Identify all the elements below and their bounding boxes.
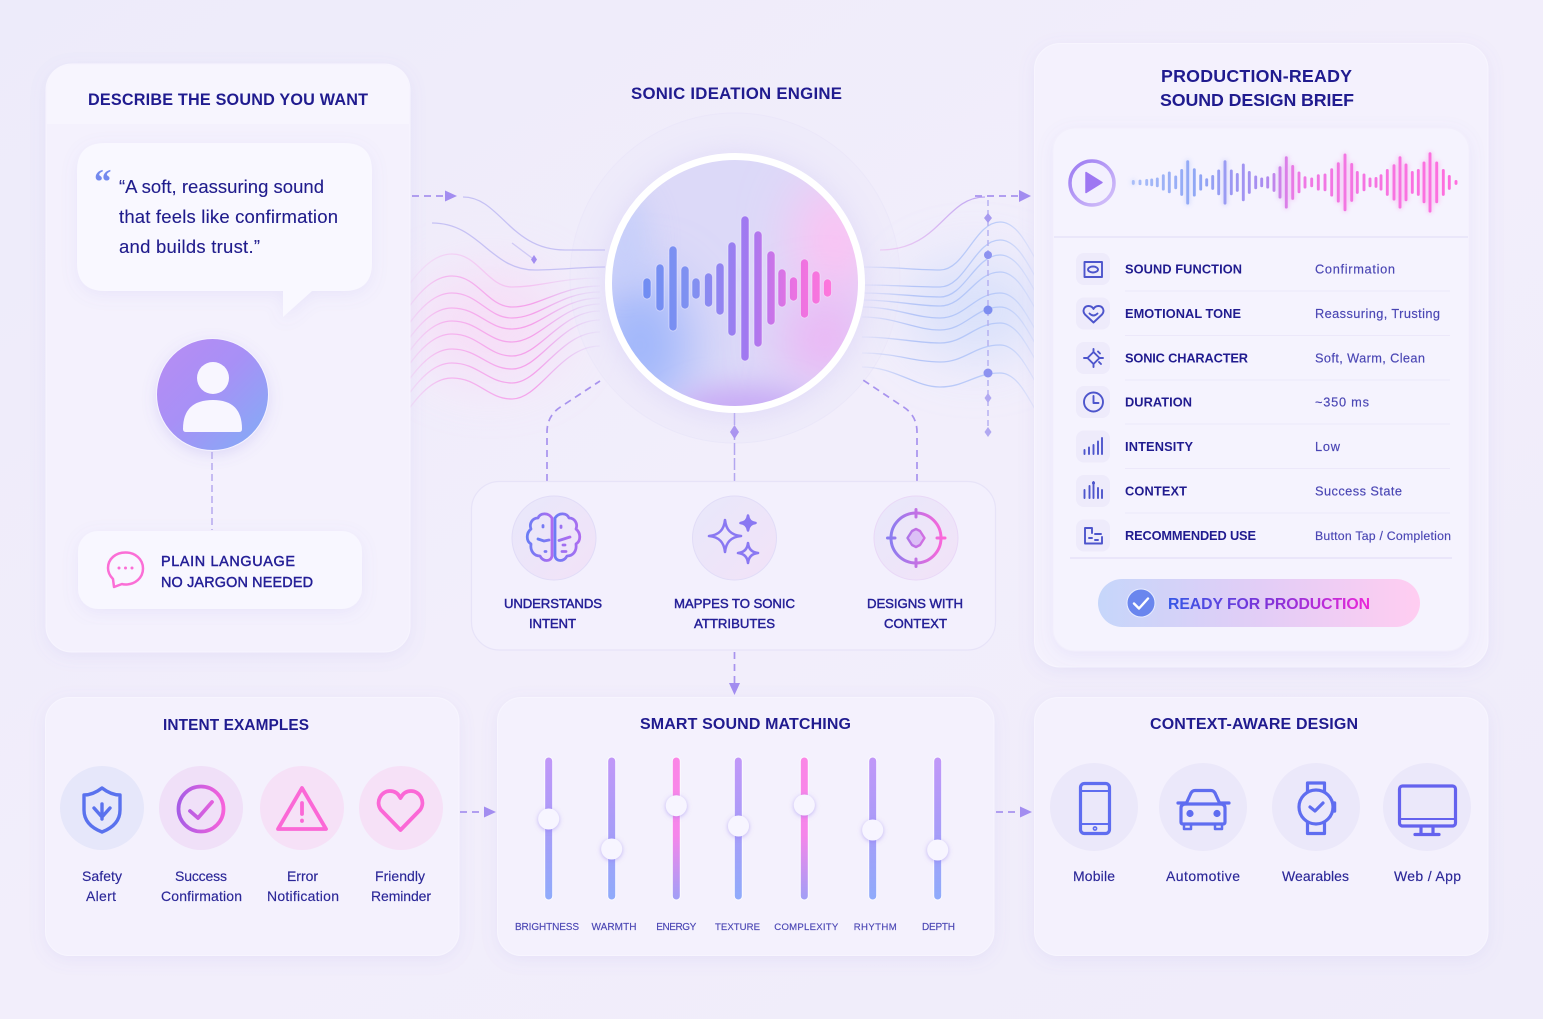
icon: watch	[1299, 783, 1334, 834]
icon: chat bubble	[108, 552, 143, 587]
label and value	[1125, 306, 1440, 321]
context label: Mobile	[1073, 868, 1115, 884]
capability label: CONTEXT	[884, 616, 947, 631]
slider: complexity	[774, 757, 839, 933]
plain language callout	[78, 531, 362, 609]
central engine orb	[604, 153, 868, 418]
label and value: SOUND FUNCTION	[1125, 262, 1242, 276]
label and value: Soft, Warm, Clean	[1315, 350, 1425, 366]
slider: complexity: COMPLEXITY	[774, 922, 839, 933]
context label: Wearables	[1282, 868, 1349, 884]
intent label: Notification	[267, 888, 339, 904]
slider: texture: TEXTURE	[715, 922, 760, 933]
status label: READY FOR PRODUCTION	[1168, 596, 1370, 613]
label and value: DURATION	[1125, 394, 1192, 410]
brief heading: PRODUCTION-READY	[1161, 66, 1352, 86]
icon: check circle	[178, 786, 224, 832]
label and value: Confirmation	[1315, 262, 1395, 276]
panel: describe the sound	[46, 64, 410, 652]
intent label	[161, 868, 242, 904]
capability: maps to sonic attributes	[674, 496, 795, 631]
intent label	[267, 868, 339, 904]
brief inner card	[1053, 128, 1469, 651]
brief heading	[1160, 66, 1354, 110]
panel heading: DESCRIBE THE SOUND YOU WANT	[88, 91, 368, 109]
icon: user avatar	[156, 338, 268, 450]
prompt text: that feels like confirmation	[119, 206, 338, 227]
intent: error notification	[260, 766, 344, 904]
connector: intent to matching	[460, 806, 496, 818]
connectors: engine to capability panel	[547, 378, 917, 481]
slider: brightness: BRIGHTNESS	[515, 922, 579, 933]
slider: rhythm	[854, 757, 897, 933]
context: mobile	[1050, 763, 1138, 884]
icon: clock	[1084, 392, 1103, 412]
panel: smart sound matching	[498, 698, 994, 956]
intent label: Safety	[82, 868, 122, 884]
slider: rhythm: RHYTHM	[854, 922, 897, 933]
label and value: EMOTIONAL TONE	[1125, 306, 1241, 321]
slider: energy: ENERGY	[656, 922, 697, 933]
connector: matching to context	[996, 806, 1032, 818]
panel: engine capabilities	[472, 482, 996, 650]
intent: safety alert	[60, 766, 144, 904]
label and value	[1125, 439, 1341, 454]
intent label: Friendly	[375, 868, 425, 884]
icon: context bars	[1084, 482, 1102, 498]
panel: intent examples	[46, 698, 459, 956]
prompt text	[119, 176, 338, 257]
capability label: DESIGNS WITH	[867, 596, 963, 611]
icon: play button	[1070, 161, 1114, 205]
icon: device checklist	[1085, 528, 1102, 544]
intent label: Confirmation	[161, 888, 242, 904]
label and value	[1125, 262, 1395, 276]
panel: context-aware design	[1034, 698, 1488, 956]
context label: Automotive	[1166, 868, 1240, 884]
audio waveform	[1133, 154, 1456, 211]
context label: Web / App	[1394, 868, 1461, 884]
panel heading: INTENT EXAMPLES	[163, 717, 309, 734]
label and value: Button Tap / Completion	[1315, 529, 1451, 543]
label and value: Low	[1315, 439, 1341, 454]
plain language text: NO JARGON NEEDED	[161, 575, 313, 591]
orb waveform bars	[643, 216, 832, 361]
label and value: SONIC CHARACTER	[1125, 350, 1248, 366]
icon: car	[1178, 790, 1229, 829]
row dividers	[1070, 291, 1452, 558]
speech bubble with prompt	[77, 143, 372, 317]
prompt text: “A soft, reassuring sound	[119, 176, 324, 197]
icon: warning triangle	[278, 788, 326, 829]
panel heading: CONTEXT-AWARE DESIGN	[1150, 716, 1358, 733]
icon: phone	[1080, 784, 1110, 834]
row: duration	[1076, 386, 1369, 418]
label and value: CONTEXT	[1125, 484, 1187, 498]
row: emotional tone	[1076, 298, 1440, 330]
row: recommended use	[1076, 520, 1451, 552]
icon: heart	[379, 791, 422, 830]
icon: heart smile	[1084, 306, 1103, 322]
label and value: ~350 ms	[1315, 394, 1369, 410]
row: context	[1076, 475, 1402, 507]
label and value: RECOMMENDED USE	[1125, 528, 1256, 543]
capability label: ATTRIBUTES	[694, 616, 775, 631]
label and value	[1125, 484, 1402, 498]
icon: speech eye	[1084, 262, 1102, 277]
label and value	[1125, 528, 1451, 543]
intent label: Alert	[86, 888, 116, 904]
capability label: INTENT	[529, 616, 576, 631]
divider under player	[1054, 236, 1468, 238]
row: sonic character	[1076, 342, 1425, 374]
icon: check badge	[1127, 589, 1155, 617]
sound waves leaving the engine	[862, 197, 1036, 411]
brief heading: SOUND DESIGN BRIEF	[1160, 90, 1354, 110]
intent label: Reminder	[371, 888, 431, 904]
intent: friendly reminder	[359, 766, 443, 904]
connector: input arrow to engine	[412, 190, 457, 202]
connector: avatar to plain language	[211, 452, 213, 530]
icon: shield	[84, 788, 120, 832]
capability: understands intent	[504, 496, 602, 631]
label and value: Reassuring, Trusting	[1315, 306, 1440, 321]
panel: production-ready brief	[1034, 44, 1488, 667]
capability label	[504, 596, 602, 631]
status pill: ready for production	[1098, 579, 1420, 627]
engine title: SONIC IDEATION ENGINE	[631, 84, 842, 103]
intent label: Success	[175, 868, 227, 884]
capability: designs with context	[867, 496, 963, 631]
connector: capabilities to smart matching	[729, 652, 740, 695]
slider: warmth	[592, 757, 636, 933]
capability label	[867, 596, 963, 631]
context: wearables	[1272, 763, 1360, 884]
icon: sparkle burst	[1084, 349, 1103, 367]
plain language text	[161, 554, 313, 591]
label and value: Success State	[1315, 484, 1402, 498]
intent label: Error	[287, 868, 318, 884]
slider: energy	[656, 757, 697, 933]
panel heading: SMART SOUND MATCHING	[640, 716, 851, 733]
icon: sparkles	[709, 516, 758, 563]
slider: warmth: WARMTH	[592, 922, 636, 933]
plain language text: PLAIN LANGUAGE	[161, 554, 295, 570]
slider: depth	[922, 757, 955, 933]
intent label	[371, 868, 431, 904]
intent: success confirmation	[159, 766, 243, 904]
label and value	[1125, 350, 1425, 366]
context: automotive	[1159, 763, 1247, 884]
vertical timeline with nodes	[984, 200, 992, 437]
capability label: MAPPES TO SONIC	[674, 596, 795, 611]
row: intensity	[1076, 430, 1341, 462]
icon: brain	[527, 514, 580, 560]
connector: engine output arrow to brief	[975, 190, 1031, 202]
label and value: INTENSITY	[1125, 439, 1193, 454]
icon: monitor	[1400, 786, 1456, 834]
slider: brightness	[515, 757, 579, 933]
soft glow behind wave lines	[415, 260, 1045, 380]
icon: signal bars	[1084, 438, 1102, 454]
icon: quote mark: “	[94, 162, 112, 201]
row: sound function	[1076, 253, 1395, 285]
icon: target	[888, 510, 945, 566]
slider: texture	[715, 757, 760, 933]
intent label	[82, 868, 122, 904]
engine halo ring	[570, 113, 900, 443]
sound waves entering the engine	[404, 197, 605, 416]
prompt text: and builds trust.”	[119, 236, 260, 257]
context: web and app	[1383, 763, 1471, 884]
capability label	[674, 596, 795, 631]
label and value	[1125, 394, 1369, 410]
capability label: UNDERSTANDS	[504, 596, 602, 611]
slider: depth: DEPTH	[922, 922, 955, 933]
